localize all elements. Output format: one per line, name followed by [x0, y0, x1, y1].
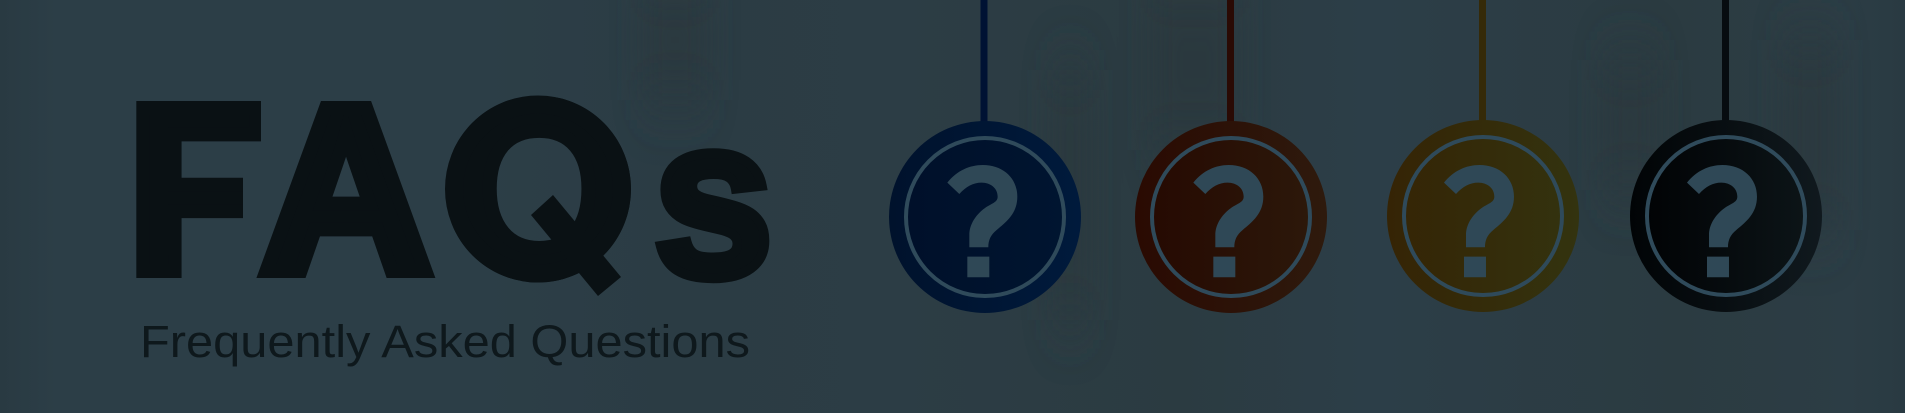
heading: FAQs: A — [260, 57, 432, 322]
icon: red question mark — [1135, 0, 1327, 313]
FAQ banner — [136, 0, 1822, 366]
icon: black question mark — [1630, 0, 1822, 312]
heading: FAQs: F — [128, 57, 264, 321]
heading: FAQs: Q — [444, 53, 635, 325]
heading: FAQs — [136, 96, 770, 296]
icon: yellow question mark — [1387, 0, 1579, 312]
icon: blue question mark — [889, 0, 1081, 313]
subtitle: Frequently Asked Questions — [140, 316, 750, 367]
heading: FAQs: s — [653, 71, 773, 325]
